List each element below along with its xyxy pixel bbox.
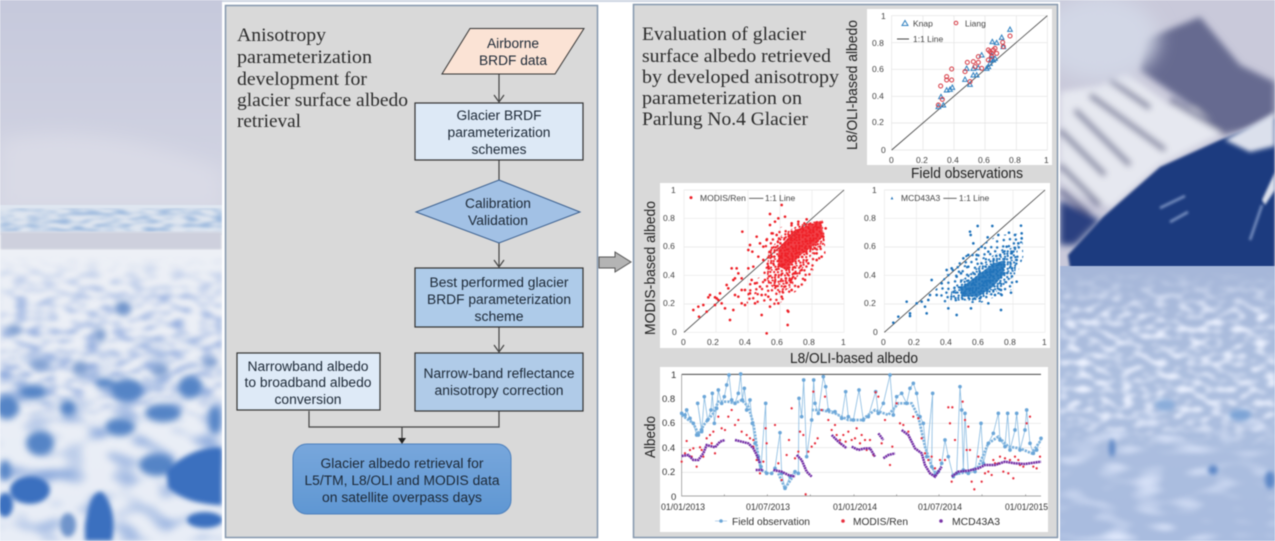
legend: scatter one: 1:1 Line (913, 34, 944, 44)
chart: L8/OLI albedo versus field observations (867, 9, 1052, 165)
tick labels: MCD43A3 scatter: 0.2 (908, 337, 920, 347)
tick labels: MODIS/Ren scatter (663, 185, 846, 347)
panel: anisotropy parameterization development flowchart (226, 6, 598, 538)
box: best performed scheme: Best performed glacier (430, 275, 569, 290)
chart: albedo time series (660, 367, 1048, 532)
legend: MODIS/Ren: 1:1 Line (765, 193, 796, 203)
tick labels: time series dates: 01/01/2015 (1005, 502, 1048, 513)
tick labels: MODIS/Ren scatter: 0 (672, 327, 677, 337)
tick labels: MCD43A3 scatter: 1 (872, 185, 877, 195)
chart: MCD43A3 scatter (864, 185, 1047, 347)
tick labels: MCD43A3 scatter: 0.4 (940, 337, 952, 347)
box: narrowband to broadband conversion: Narrowband albedo (248, 359, 368, 374)
heading: right panel title: surface albedo retrieved (642, 47, 832, 67)
tick labels: scatter one: 0.2 (916, 155, 928, 165)
input: airborne BRDF data (442, 28, 584, 74)
tick labels: time series y axis (662, 370, 676, 503)
tick labels: time series y axis: 0.8 (662, 394, 675, 405)
tick labels: scatter one: 0 (889, 155, 894, 165)
tick labels: MODIS/Ren scatter: 0.6 (771, 337, 783, 347)
legend: MCD43A3: 1:1 Line (959, 193, 990, 203)
box: glacier BRDF parameterization schemes: schemes (472, 142, 527, 157)
axis label: L8/OLI-based albedo horizontal: L8/OLI-based albedo (790, 351, 918, 367)
heading: left panel title: glacier surface albedo (237, 91, 408, 111)
tick labels: MCD43A3 scatter: 0.8 (1004, 337, 1016, 347)
box: best performed scheme (415, 268, 583, 327)
legend: MCD43A3: MCD43A3 (901, 193, 940, 203)
tick labels: scatter one: 0.2 (872, 117, 884, 127)
series: field observation (682, 374, 1041, 488)
decision: calibration and validation (416, 180, 580, 243)
tick labels: scatter one: 0.4 (947, 155, 959, 165)
tick labels: MODIS/Ren scatter: 0.4 (739, 337, 751, 347)
box: narrowband to broadband conversion (237, 353, 380, 410)
heading: left panel title (237, 26, 408, 132)
tick labels: MODIS/Ren scatter: 0.8 (663, 213, 675, 223)
tick labels: MCD43A3 scatter: 0.6 (972, 337, 984, 347)
tick labels: time series dates: 01/01/2013 (661, 502, 705, 513)
arrow: from development to evaluation (599, 252, 631, 272)
series: MCD43A3 (682, 430, 1041, 477)
tick labels: time series y axis: 1 (671, 370, 676, 381)
chart: MODIS/Ren scatter (663, 185, 846, 347)
legend: MODIS/Ren: MODIS/Ren (700, 193, 746, 203)
axis label: L8/OLI-based albedo vertical: L8/OLI-based albedo (845, 20, 861, 150)
box: glacier BRDF parameterization schemes (415, 103, 583, 160)
legend: scatter one: Liang (965, 18, 986, 28)
legend: time series: Field observation (732, 516, 810, 528)
tick labels: scatter one: 0.8 (872, 38, 884, 48)
box: glacier albedo retrieval (293, 444, 511, 514)
tick labels: MCD43A3 scatter: 0.4 (864, 270, 876, 280)
input: airborne BRDF data: Airborne (487, 36, 539, 51)
tick labels: MCD43A3 scatter: 0.8 (864, 213, 876, 223)
heading: right panel title: by developed anisotropy (642, 68, 840, 88)
tick labels: MCD43A3 scatter: 0.2 (864, 298, 876, 308)
legend: time series (715, 516, 1000, 528)
heading: right panel title: parameterization on (642, 89, 802, 109)
tick labels: MODIS/Ren scatter: 0.8 (803, 337, 815, 347)
series: MODIS/Ren (682, 392, 1040, 494)
tick labels: time series y axis: 0.4 (662, 443, 675, 454)
box: narrowband to broadband conversion: conversion (274, 392, 342, 407)
panel: evaluation of glacier surface albedo (634, 4, 1058, 538)
heading: right panel title: Parlung No.4 Glacier (642, 110, 808, 130)
tick labels: MCD43A3 scatter (864, 185, 1047, 347)
box: best performed scheme: BRDF parameterization (427, 292, 571, 307)
background photo: glacier and sky, left side (0, 0, 223, 541)
tick labels: scatter one: 0 (881, 145, 886, 155)
axis label: Albedo: Albedo (643, 416, 659, 458)
tick labels: MCD43A3 scatter: 0 (881, 337, 886, 347)
heading: left panel title: Anisotropy (237, 26, 327, 46)
box: glacier albedo retrieval: Glacier albedo retrieval for (320, 456, 484, 471)
tick labels: MCD43A3 scatter: 1 (1042, 337, 1047, 347)
tick labels: MODIS/Ren scatter: 1 (841, 337, 846, 347)
tick labels: MODIS/Ren scatter: 1 (671, 185, 676, 195)
tick labels: scatter one: 0.6 (872, 64, 884, 74)
tick labels: MODIS/Ren scatter: 0.4 (663, 270, 675, 280)
box: glacier BRDF parameterization schemes: parameterization (448, 125, 550, 140)
decision: calibration and validation: Validation (468, 213, 528, 228)
legend: time series: MODIS/Ren (853, 516, 908, 528)
heading: left panel title: parameterization (237, 48, 372, 68)
tick labels: MODIS/Ren scatter: 0.2 (707, 337, 719, 347)
legend: MODIS/Ren (700, 193, 796, 203)
box: narrow-band reflectance anisotropy correction (415, 353, 583, 411)
input: airborne BRDF data: BRDF data (479, 53, 547, 68)
tick labels: scatter one: 0.4 (872, 91, 884, 101)
tick labels: time series y axis: 0 (671, 492, 676, 503)
tick labels: time series dates (661, 502, 1048, 513)
tick labels: time series dates: 01/01/2014 (833, 502, 877, 513)
heading: right panel title (642, 25, 840, 130)
box: narrow-band reflectance anisotropy correction: Narrow-band reflectance (424, 366, 574, 381)
tick labels: time series y axis: 0.6 (662, 418, 675, 429)
white centre background (222, 0, 1060, 541)
axis label: field observations: Field observations (911, 166, 1023, 182)
tick labels: MODIS/Ren scatter: 0.2 (663, 298, 675, 308)
tick labels: MODIS/Ren scatter: 0.6 (663, 241, 675, 251)
legend: scatter one (897, 18, 986, 44)
tick labels: MCD43A3 scatter: 0 (873, 327, 878, 337)
tick labels: scatter one: 1 (1044, 155, 1049, 165)
legend: MCD43A3 (901, 193, 990, 203)
charts: MODIS-based versus L8/OLI-based albedo (660, 183, 1050, 348)
heading: right panel title: Evaluation of glacier (642, 25, 806, 45)
arrows: flowchart connectors (309, 74, 504, 444)
tick labels: time series dates: 01/07/2014 (918, 502, 962, 513)
box: best performed scheme: scheme (474, 309, 524, 324)
tick labels: scatter one: 0.6 (978, 155, 990, 165)
tick labels: scatter one: 0.8 (1009, 155, 1021, 165)
box: narrowband to broadband conversion: to broadband albedo (244, 375, 372, 390)
tick labels: time series y axis: 0.2 (662, 467, 675, 478)
tick labels: MODIS/Ren scatter: 0 (681, 337, 686, 347)
heading: left panel title: retrieval (237, 112, 301, 132)
axis label: MODIS-based albedo: MODIS-based albedo (643, 201, 659, 335)
tick labels: MCD43A3 scatter: 0.6 (864, 241, 876, 251)
box: narrow-band reflectance anisotropy correction: anisotropy correction (434, 383, 564, 398)
tick labels: scatter one (872, 11, 1049, 165)
legend: scatter one: Knap (913, 18, 933, 28)
tick labels: scatter one: 1 (881, 11, 886, 21)
legend: time series: MCD43A3 (952, 516, 1000, 528)
heading: left panel title: development for (237, 70, 367, 90)
decision: calibration and validation: Calibration (465, 196, 531, 211)
box: glacier BRDF parameterization schemes: Glacier BRDF (456, 108, 542, 123)
box: glacier albedo retrieval: on satellite overpass days (322, 490, 482, 505)
box: glacier albedo retrieval: L5/TM, L8/OLI and MODIS data (304, 473, 500, 488)
background photo: mountains and glacier, right side (1042, 0, 1275, 541)
tick labels: time series dates: 01/07/2013 (746, 502, 790, 513)
